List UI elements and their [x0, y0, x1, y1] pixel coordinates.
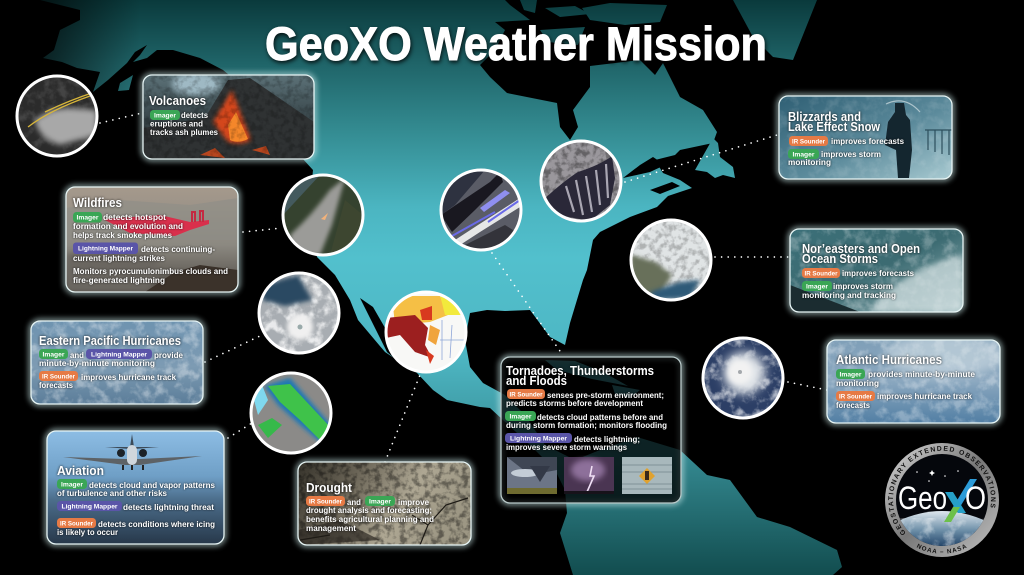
- body text: Lightning Mapper: [510, 436, 567, 442]
- map: North and South America: [30, 0, 842, 575]
- body text: Imager: [793, 152, 815, 158]
- body text: drought analysis and forecasting;: [306, 505, 432, 515]
- panel: tornadoes, thunderstorms and floods: [501, 357, 681, 503]
- body text: senses pre-storm environment;: [547, 390, 664, 400]
- body text: detects hotspot: [103, 212, 166, 222]
- panel: blizzards and lake effect snow: [779, 96, 952, 179]
- body text: provide: [154, 350, 183, 360]
- logo: GeoXO mission emblem: NOAA – NASA: [916, 544, 967, 554]
- body text: forecasts: [836, 400, 870, 410]
- body text: current lightning strikes: [73, 253, 165, 263]
- body text: improves severe storm warnings: [506, 442, 627, 452]
- body text: [73, 212, 228, 285]
- circle: nor'easter satellite image: [631, 220, 711, 300]
- body text: detects: [181, 110, 208, 120]
- panel: eastern pacific hurricanes: [31, 321, 203, 404]
- body text: improve: [398, 497, 429, 507]
- body text: Lightning Mapper: [78, 246, 133, 252]
- dotted connector: wildfires: [243, 228, 282, 232]
- body text: benefits agricultural planning and: [306, 514, 434, 524]
- dotted connector: drought: [385, 375, 420, 462]
- heading: [802, 242, 920, 266]
- panel: nor'easters and open ocean storms: [790, 229, 963, 312]
- body text: helps track smoke plumes: [73, 230, 172, 240]
- body text: detects cloud patterns before and: [537, 412, 663, 422]
- body text: Imager: [154, 112, 176, 120]
- body text: improves storm: [833, 281, 893, 291]
- body text: IR Sounder: [792, 138, 825, 146]
- body text: Lightning Mapper: [62, 504, 118, 510]
- body text: and: [347, 497, 361, 507]
- body text: Lightning Mapper: [91, 352, 147, 358]
- body text: provides minute-by-minute: [868, 369, 975, 379]
- heading: Atlantic Hurricanes: [836, 353, 942, 367]
- dotted connector: volcanoes: [100, 113, 142, 123]
- body text: improves forecasts: [842, 268, 914, 278]
- clouds photo background: [31, 321, 203, 404]
- body text: formation and evolution and: [73, 221, 183, 231]
- panel: atlantic hurricanes: [827, 333, 1005, 423]
- body text: monitoring: [788, 157, 831, 167]
- body text: [802, 268, 914, 300]
- logo: GeoXO mission emblem: GEOSTATIONARY EXTENDED OBSERVATIONS: [888, 446, 996, 535]
- title: GeoXO Weather Mission: [265, 17, 767, 70]
- body text: [836, 369, 975, 410]
- body text: [57, 479, 215, 537]
- jet aircraft: [63, 434, 202, 470]
- heading: [506, 364, 654, 388]
- red air tanker: [103, 215, 209, 236]
- circle: aviation radar image: [251, 373, 331, 453]
- body text: detects cloud and vapor patterns: [89, 480, 215, 490]
- photo: flooded road sign: [622, 457, 672, 494]
- body text: is likely to occur: [57, 527, 119, 537]
- snow photo background: [779, 96, 952, 179]
- circle: eastern pacific hurricane satellite image: [259, 273, 339, 353]
- wildfire photo background: [66, 187, 238, 292]
- body text: [505, 389, 667, 452]
- body text: Imager: [43, 352, 65, 358]
- hurricane photo background: [828, 340, 1000, 422]
- body text: during storm formation; monitors flooding: [506, 420, 667, 430]
- logo: GeoXO mission emblem: O: [965, 480, 986, 516]
- panel: volcanoes: [143, 73, 314, 159]
- dotted connector: atlantic hurricanes: [788, 382, 827, 390]
- circle: lake effect snow image: [541, 141, 621, 221]
- circle: volcanic ash satellite image: [17, 76, 97, 156]
- dotted connector: eastern pacific hurricanes: [205, 335, 262, 362]
- body text: management: [306, 523, 356, 533]
- heading: Volcanoes: [149, 94, 206, 108]
- body text: fire-generated lightning: [73, 275, 165, 285]
- circle: wildfire satellite image: [283, 175, 363, 255]
- dotted connector: nor'easters: [715, 256, 788, 258]
- body text: detects continuing-: [141, 244, 215, 254]
- body text: IR Sounder: [804, 270, 838, 278]
- body text: Monitors pyrocumulonimbus clouds and: [73, 266, 228, 276]
- cracked earth photo background: [298, 462, 471, 545]
- heading: Lake Effect Snow: [788, 120, 880, 134]
- heading: Aviation: [57, 464, 104, 478]
- body text: predicts storms before development: [506, 398, 643, 408]
- heading: Eastern Pacific Hurricanes: [39, 334, 181, 348]
- body text: Imager: [806, 284, 828, 290]
- heading: Ocean Storms: [802, 252, 878, 266]
- panel: wildfires: [66, 187, 238, 292]
- ocean waves photo background: [790, 229, 963, 312]
- heading: [788, 110, 880, 134]
- body text: [39, 349, 183, 390]
- circle: drought monitor map: [386, 292, 466, 372]
- dotted connector: tornadoes: [492, 253, 562, 354]
- body text: Imager: [840, 372, 862, 378]
- body text: monitoring and tracking: [802, 290, 896, 300]
- body text: detects lightning threat: [123, 502, 214, 512]
- dotted connector: blizzards: [625, 135, 777, 182]
- aircraft photo background: [47, 431, 224, 544]
- body text: improves storm: [821, 149, 881, 159]
- body text: improves hurricane track: [81, 372, 176, 382]
- body text: Imager: [369, 498, 391, 506]
- circle: atlantic hurricane satellite image: [703, 338, 783, 418]
- body text: detects conditions where icing: [98, 519, 215, 529]
- dotted connector: aviation: [228, 423, 252, 438]
- circle: lightning mapper storm image: [441, 170, 521, 250]
- body text: tracks ash plumes: [150, 127, 218, 137]
- photo: lightning: [564, 457, 614, 494]
- body text: [150, 110, 218, 137]
- heading: Drought: [306, 481, 353, 495]
- body text: eruptions and: [150, 118, 203, 128]
- body text: of turbulence and other risks: [57, 488, 167, 498]
- body text: [306, 496, 434, 533]
- body text: IR Sounder: [839, 394, 872, 400]
- body text: IR Sounder: [42, 374, 75, 380]
- body text: IR Sounder: [309, 498, 342, 506]
- heading: Wildfires: [73, 196, 122, 210]
- body text: minute-by-minute monitoring: [39, 358, 155, 368]
- logo: GeoXO mission emblem: Geo: [898, 480, 947, 516]
- body text: Imager: [61, 482, 83, 488]
- body text: improves hurricane track: [877, 391, 972, 401]
- figure with umbrella: [885, 103, 912, 178]
- heading: Nor’easters and Open: [802, 242, 920, 256]
- body text: forecasts: [39, 380, 73, 390]
- body text: and: [70, 350, 84, 360]
- body text: detects lightning;: [574, 434, 640, 444]
- body text: Imager: [77, 214, 99, 222]
- body text: IR Sounder: [510, 392, 543, 398]
- heading: Tornadoes, Thunderstorms: [506, 364, 654, 378]
- heading: and Floods: [506, 374, 567, 388]
- body text: [788, 136, 904, 167]
- heading: Blizzards and: [788, 110, 861, 124]
- photo: tornado: [507, 457, 557, 494]
- body text: improves forecasts: [831, 136, 904, 146]
- body text: Imager: [510, 414, 532, 420]
- panel: aviation: [47, 431, 224, 544]
- body text: monitoring: [836, 378, 879, 388]
- body text: IR Sounder: [60, 520, 93, 528]
- panel: drought: [298, 462, 471, 545]
- volcano photo background: [143, 73, 314, 159]
